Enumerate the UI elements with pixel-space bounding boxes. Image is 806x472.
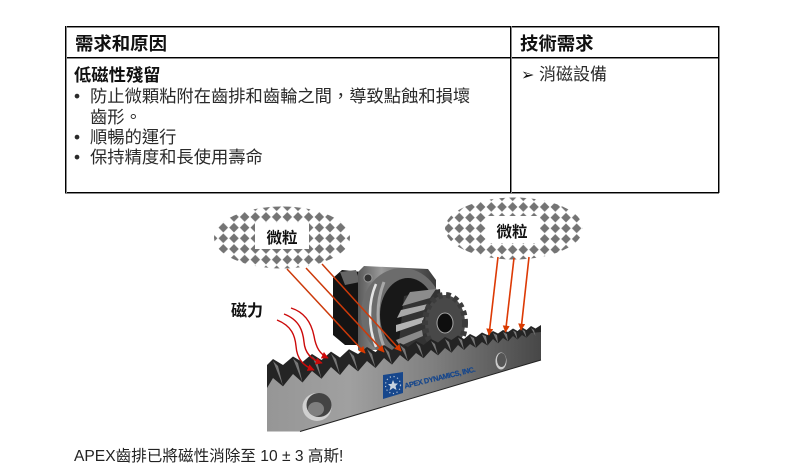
bullet: smooth operation: 順暢的運行	[90, 127, 176, 147]
particle bubble: right: 微粒	[496, 222, 528, 241]
bullet: prevent particles: 防止微顆粘附在齒排和齒輪之間，導致點蝕和損壞	[90, 86, 470, 106]
helical pinion teeth	[396, 289, 445, 352]
arrows: particles to rack, right bubble	[489, 257, 529, 335]
logo: blue square with stars	[383, 372, 403, 399]
rack body	[267, 330, 541, 432]
left mounting hole	[302, 393, 332, 421]
list item: demagnetizing equipment: ➢	[521, 65, 534, 84]
arrows: magnetic field lines	[277, 308, 328, 370]
bullet: accuracy and long life: •	[74, 147, 80, 167]
rack teeth	[267, 325, 541, 388]
gear rack	[267, 325, 541, 432]
bullet: prevent particles: 齒形。	[90, 107, 142, 127]
bullet: accuracy and long life: 保持精度和長使用壽命	[90, 147, 263, 167]
bullet: prevent particles: •	[74, 86, 80, 106]
pinion gear face	[425, 295, 465, 351]
right mounting hole	[496, 352, 506, 370]
rack tooth highlights	[273, 328, 536, 386]
heading: technical requirements: 技術需求	[520, 33, 594, 54]
heading: needs and reasons: 需求和原因	[75, 33, 167, 54]
list item: demagnetizing equipment: 消磁設備	[539, 65, 607, 84]
panel: requirements table	[65, 26, 720, 194]
particle bubble: left	[214, 206, 350, 268]
particle bubble: right	[445, 198, 583, 260]
gearbox with housing	[333, 266, 443, 360]
bullet: prevent particles	[74, 86, 470, 127]
subheading: low residual magnetism: 低磁性殘留	[74, 65, 160, 85]
logo text: APEX DYNAMICS, INC.	[403, 365, 476, 390]
caption: residual magnetism result: APEX齒排已將磁性消除至 10 ± 3 高斯!	[74, 448, 343, 465]
arrows: particles to rack, left bubble	[287, 264, 401, 353]
label: magnetic force: 磁力	[231, 302, 263, 320]
bullet: smooth operation: •	[74, 127, 80, 147]
particle bubble: left: 微粒	[266, 228, 298, 247]
